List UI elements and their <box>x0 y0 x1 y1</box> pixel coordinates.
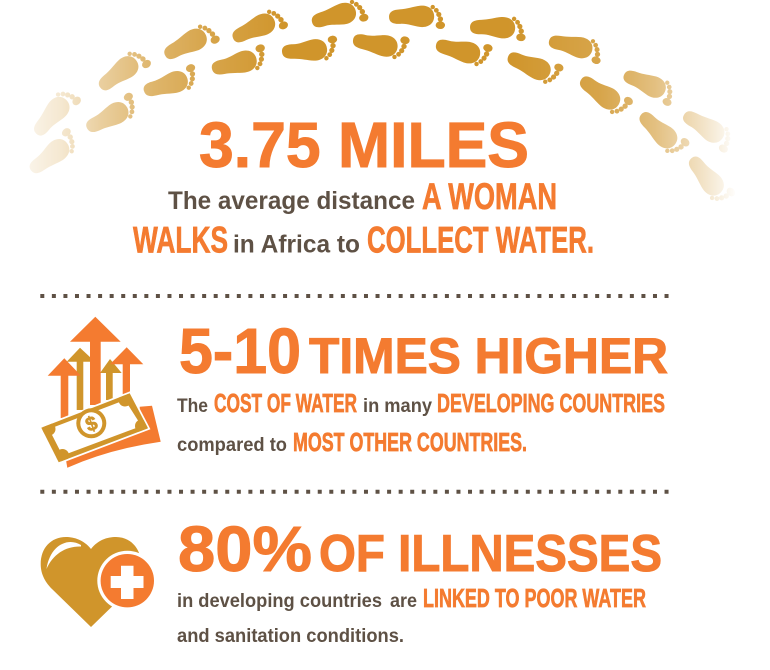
text block: distance a woman walks: The average distance <box>168 187 415 215</box>
text block: cost of water: The <box>177 395 208 417</box>
heading: 5-10 times higher <box>179 315 668 387</box>
heading: 3.75 miles: 3.75 MILES <box>199 109 529 181</box>
heading: 5-10 times higher: TIMES HIGHER <box>309 328 668 384</box>
text block: distance a woman walks: in Africa to <box>233 230 360 258</box>
icon: orange bill shadow <box>65 406 161 468</box>
icon: medical badge <box>97 551 157 611</box>
text block: cost of water: DEVELOPING COUNTRIES <box>437 390 665 418</box>
heading: 5-10 times higher: 5-10 <box>179 315 301 387</box>
icon: money with rising arrows <box>41 317 161 468</box>
text block: illnesses linked to poor water: and sanitation conditions. <box>177 625 404 647</box>
icon: heart highlight <box>46 542 81 569</box>
inner row of footprints <box>24 28 737 209</box>
footprints arc <box>24 0 738 209</box>
heading: 80% of illnesses <box>178 513 662 585</box>
text block: distance a woman walks: A WOMAN <box>422 175 557 217</box>
icon: gold arrows <box>67 348 122 410</box>
text block: distance a woman walks <box>133 175 594 260</box>
text block: cost of water: COST OF WATER <box>214 390 357 418</box>
icon: orange arrows <box>48 317 143 418</box>
text block: cost of water: MOST OTHER COUNTRIES. <box>293 429 527 457</box>
text block: illnesses linked to poor water: are <box>390 590 417 612</box>
text block: distance a woman walks: WALKS <box>133 218 228 260</box>
text block: illnesses linked to poor water: in developing countries <box>177 590 382 612</box>
heading: 80% of illnesses: 80% <box>178 513 312 585</box>
text block: cost of water: in many <box>363 395 432 417</box>
text block: illnesses linked to poor water <box>177 585 646 647</box>
text block: cost of water <box>177 390 665 457</box>
icon: banknote: $ <box>83 412 101 437</box>
text block: distance a woman walks: COLLECT WATER. <box>367 218 594 260</box>
text block: illnesses linked to poor water: LINKED TO POOR WATER <box>423 585 646 613</box>
text block: cost of water: compared to <box>177 434 287 456</box>
icon: heart with medical cross <box>41 537 157 627</box>
icon: banknote <box>41 393 148 462</box>
outer row of footprints <box>27 0 738 154</box>
heading: 80% of illnesses: OF ILLNESSES <box>319 524 662 582</box>
icon: heart <box>41 537 141 627</box>
